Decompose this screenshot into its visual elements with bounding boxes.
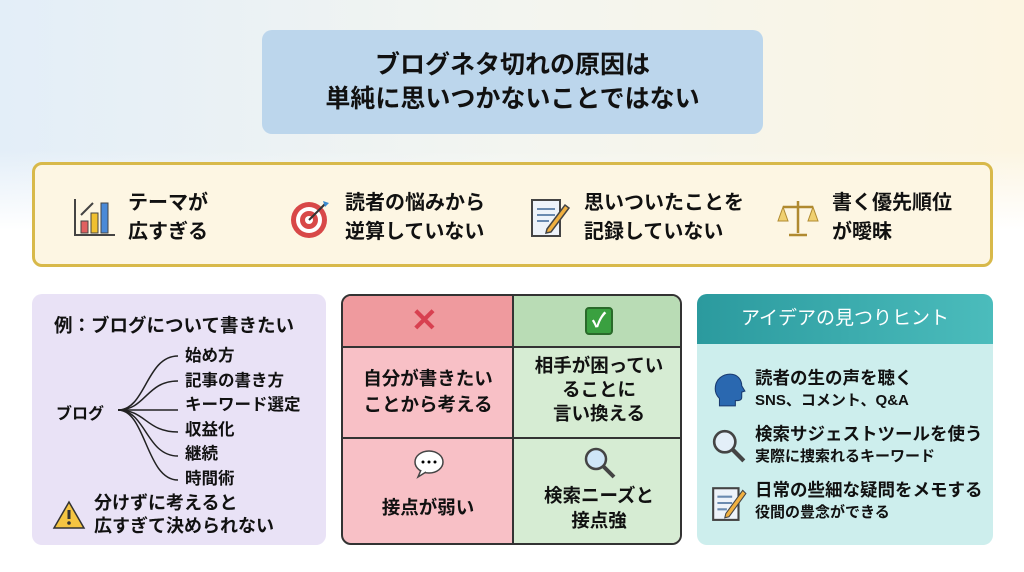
icon: bar chart [74,199,115,236]
text: 書く優先順位 [832,192,952,214]
panel: example [32,294,326,545]
good: result: 検索ニーズと [544,485,654,506]
text: 思いついたことを [584,192,744,214]
hint 2: 実際に捜索れるキーワード [755,448,935,465]
mind map [56,346,300,488]
heading: 例：ブログについて書きたい [54,315,294,336]
mind map: 時間術 [185,470,234,488]
cause 3 [531,192,744,243]
text [128,192,208,243]
good: method: ることに [562,379,636,400]
panel: hints [697,294,993,545]
good: method: 言い換える [553,403,645,424]
hint 1: SNS、コメント、Q&A [755,392,909,409]
text: 記録していない [584,221,723,243]
icon: target [291,201,329,238]
hint 3 [712,480,982,521]
mind map: 継続 [185,445,218,463]
hint 1: 読者の生の声を聴く [755,368,912,388]
title: ブログネタ切れの原因は [375,51,650,79]
comparison table [341,294,682,545]
title [262,30,763,134]
text: が曖昧 [832,221,892,243]
hint 3: 役間の豊念ができる [755,504,890,521]
icon: memo [531,199,570,237]
good: result: 接点強 [571,510,627,531]
good: result [544,485,654,531]
mind map: キーワード選定 [185,396,300,414]
text: 読者の悩みから [345,192,485,214]
warning [52,493,274,536]
bad: method: 自分が書きたい [363,368,493,389]
mind map: 記事の書き方 [185,372,284,390]
hint 2: 検索サジェストツールを使う [755,424,982,444]
cause 4 [777,192,952,243]
warning: 広すぎて決められない [94,516,274,536]
good: method: 相手が困ってい [535,355,663,376]
warning: 分けずに考えると [94,493,237,513]
heading: アイデアの見つりヒント [741,308,949,329]
text: 広すぎる [128,221,208,243]
hint 2 [712,424,982,465]
bad: method: ことから考える [364,394,492,415]
title: 単純に思いつかないことではない [325,85,700,113]
text [345,192,485,243]
icon: scales [777,201,819,236]
text [832,192,952,243]
heading [697,294,993,344]
icon: check [585,307,613,335]
mind map: ブログ [56,406,104,423]
icon: cross: ✕ [411,302,438,338]
text: テーマが [128,192,208,214]
icon: check: ✓ [592,310,606,332]
mind map: 始め方 [185,347,234,365]
cause 2 [291,192,485,243]
text: 逆算していない [345,221,484,243]
hint 1 [714,368,912,409]
good: method [535,355,663,424]
icon: magnifier [584,448,616,478]
hint 3: 日常の些細な疑問をメモする [755,480,982,500]
icon: speech bubble [414,450,444,479]
bad: method [363,368,493,415]
text [584,192,744,243]
panel: causes [32,162,993,267]
mind map: 収益化 [185,420,234,438]
bad: result: 接点が弱い [382,497,474,518]
cause 1 [74,192,208,243]
